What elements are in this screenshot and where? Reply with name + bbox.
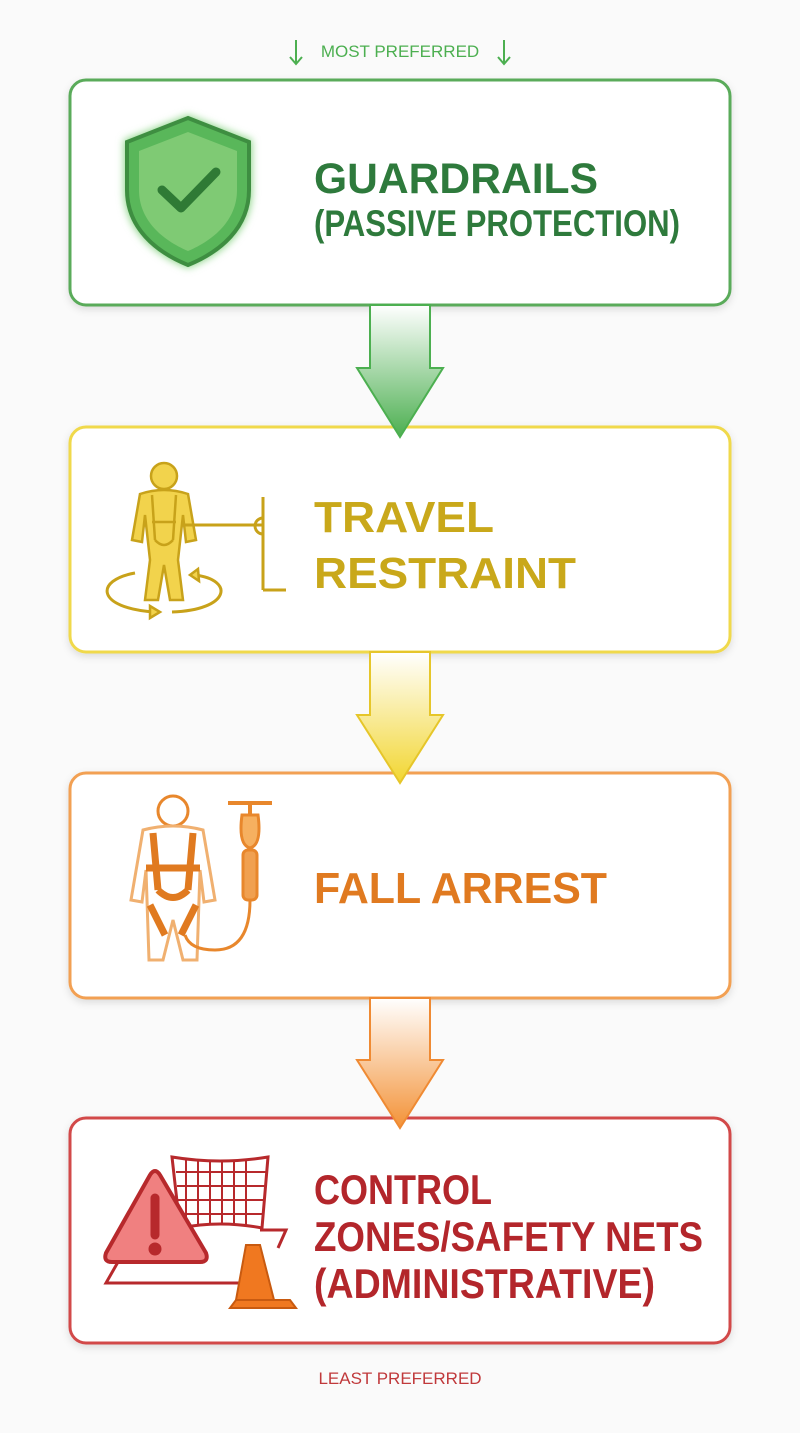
icon: shield [124,115,252,268]
panel: fall arrest [70,773,730,998]
arrow 3 [357,998,443,1128]
panel: control zones: (ADMINISTRATIVE) [314,1260,655,1307]
top label: most preferred: MOST PREFERRED [321,42,479,61]
heading: control zones: CONTROL [314,1166,492,1213]
icon: travel restraint [107,463,286,618]
panel: control zones [70,1118,730,1343]
panel: travel restraint [70,427,730,652]
panel: guardrails [70,80,730,305]
panel: travel restraint: RESTRAINT [314,549,576,598]
arrow 1 [357,305,443,437]
heading: travel restraint: TRAVEL [314,493,494,542]
arrow 2 [357,652,443,783]
icon: net, warning, cone [105,1157,296,1308]
bottom label: least preferred: LEAST PREFERRED [318,1369,482,1388]
heading: guardrails: GUARDRAILS [314,155,598,203]
top label: most preferred [290,40,510,64]
panel: guardrails: (PASSIVE PROTECTION) [314,203,680,244]
panel: control zones: ZONES/SAFETY NETS [314,1213,703,1260]
heading: fall arrest: FALL ARREST [314,864,607,913]
icon: harness [131,796,272,960]
